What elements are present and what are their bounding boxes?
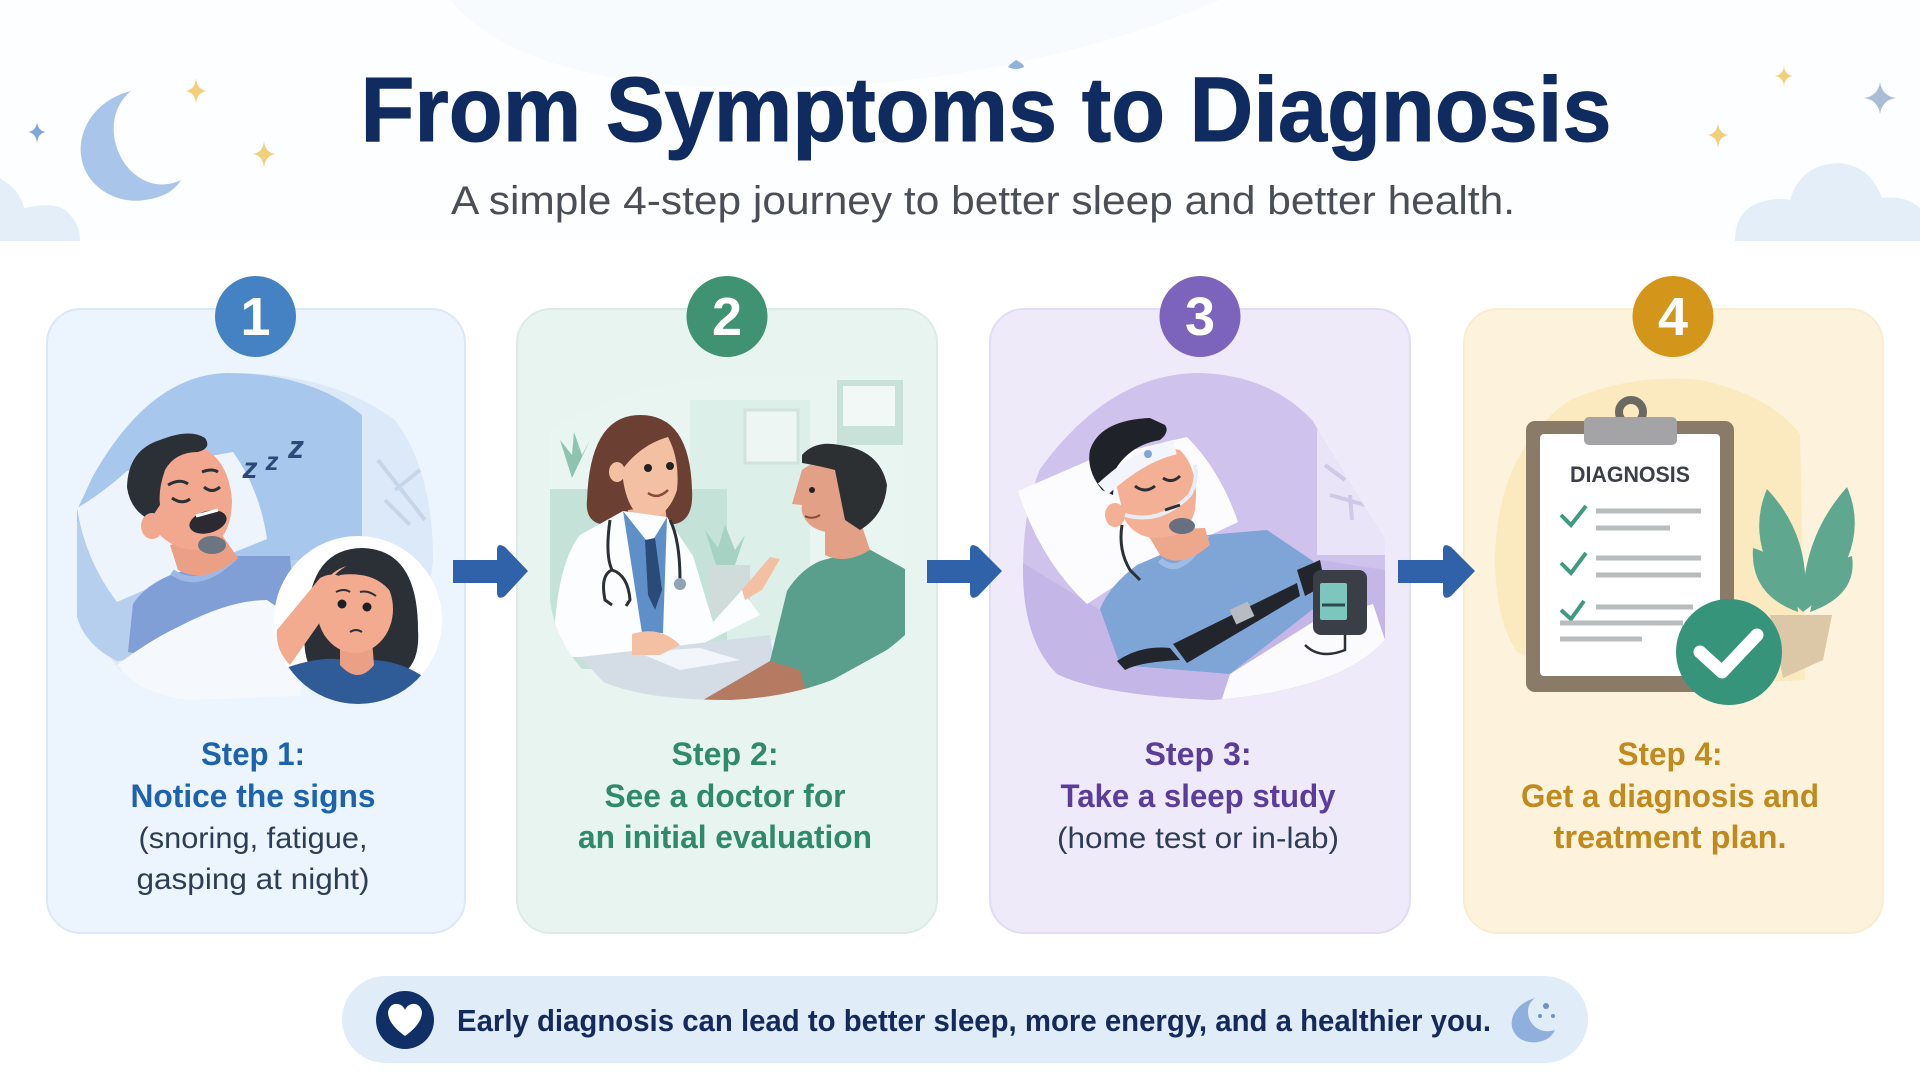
icon: small moon (1512, 998, 1555, 1042)
step 1 number badge (215, 276, 296, 357)
icon: heart (376, 991, 434, 1049)
step 2 number badge: 2 (712, 287, 742, 347)
step 1 caption: Step 1: (201, 736, 305, 772)
illustration: diagnosis clipboard (1495, 379, 1855, 705)
illustration: man snoring in bed (77, 373, 433, 700)
illustration: man snoring in bed: z (287, 429, 304, 465)
step 2 caption: See a doctor for (604, 778, 846, 814)
icon: crescent moon (81, 91, 181, 201)
step 4 caption (1521, 736, 1819, 855)
cloud left (0, 178, 80, 241)
illustration: man snoring in bed: z (242, 452, 258, 485)
title: From Symptoms to Diagnosis (360, 59, 1612, 161)
panel: step 2 (517, 276, 937, 933)
step 4 number badge (1632, 276, 1714, 357)
illustration: man snoring in bed: z (264, 446, 278, 476)
illustration: diagnosis clipboard: DIAGNOSIS (1570, 462, 1690, 487)
panel: step 1 (47, 276, 465, 933)
illustration: patient in sleep study (1018, 370, 1388, 705)
footer callout (342, 976, 1588, 1063)
step 1 caption: Notice the signs (130, 778, 376, 814)
footer message: Early diagnosis can lead to better sleep, more energy, and a healthier you. (457, 1003, 1491, 1038)
illustration: tired woman in circle (274, 536, 442, 710)
cloud right (1735, 163, 1920, 241)
step 3 number badge: 3 (1185, 287, 1215, 347)
arrow: step 1 to step 2 (453, 545, 528, 598)
step 3 caption (1057, 736, 1339, 855)
step 3 caption: Step 3: (1144, 736, 1252, 772)
decorative stars (28, 60, 1896, 168)
panel: step 4 (1464, 276, 1883, 933)
illustration: doctor and patient (545, 375, 910, 705)
step 1 caption: (snoring, fatigue, (138, 822, 368, 855)
arrow: step 3 to step 4 (1398, 545, 1475, 598)
step 2 caption (578, 736, 872, 855)
step 2 caption: an initial evaluation (578, 819, 872, 855)
arrow: step 2 to step 3 (927, 545, 1002, 598)
step 4 number badge: 4 (1658, 287, 1688, 347)
step 1 caption: gasping at night) (136, 863, 370, 896)
step 4 caption: Get a diagnosis and (1521, 778, 1819, 814)
step 2 number badge (686, 276, 768, 357)
step 1 caption (130, 736, 376, 896)
step 3 caption: Take a sleep study (1060, 778, 1336, 814)
panel: step 3 (990, 276, 1410, 933)
step 3 caption: (home test or in-lab) (1057, 822, 1339, 855)
step 4 caption: treatment plan. (1554, 819, 1786, 855)
step 4 caption: Step 4: (1618, 736, 1722, 772)
step 2 caption: Step 2: (672, 736, 778, 772)
header background (0, 0, 1920, 241)
step 1 number badge: 1 (240, 287, 271, 347)
step 3 number badge (1160, 276, 1240, 357)
subtitle: A simple 4-step journey to better sleep and better health. (451, 179, 1515, 223)
